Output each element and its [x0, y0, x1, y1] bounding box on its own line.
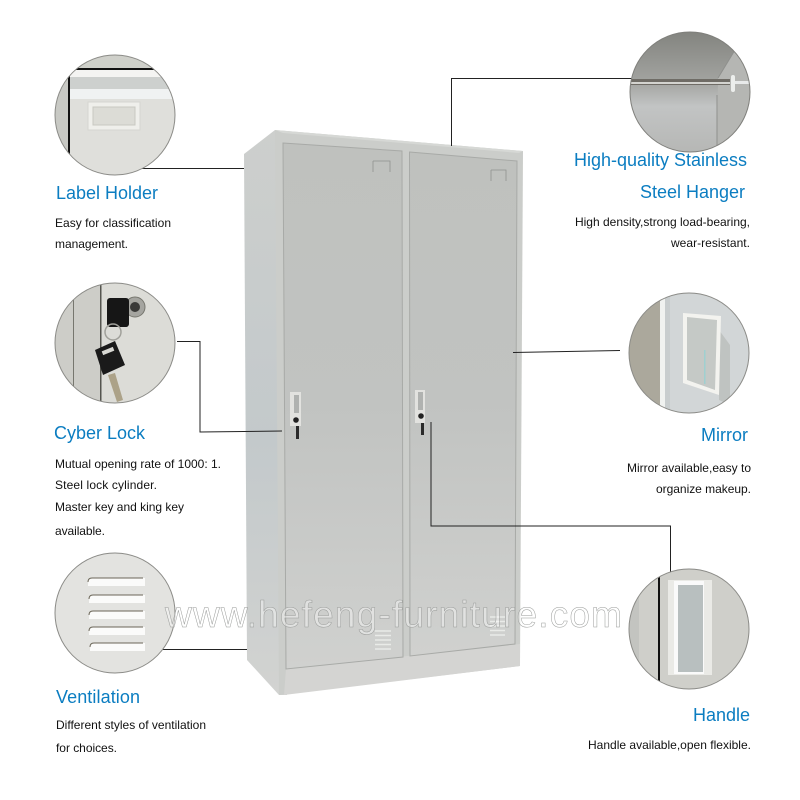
description: Mirror available,easy to — [627, 461, 751, 475]
description: Handle available,open flexible. — [588, 738, 751, 752]
connector lines — [140, 78, 670, 650]
description — [575, 215, 750, 250]
description — [55, 457, 221, 538]
vent slots — [375, 631, 391, 649]
description: High density,strong load-bearing, — [575, 215, 750, 229]
description: Different styles of ventilation — [56, 718, 206, 732]
panel: handle — [588, 569, 751, 752]
right door — [410, 152, 517, 656]
description: Mutual opening rate of 1000: 1. — [55, 457, 221, 471]
panel: stainless steel hanger — [574, 32, 752, 250]
panel: mirror — [627, 293, 751, 496]
handle and lock — [290, 392, 301, 439]
heading: Mirror — [701, 425, 748, 445]
icon: ventilation slots photo — [55, 553, 175, 673]
handle and lock — [415, 390, 425, 435]
cabinet front frame — [275, 130, 523, 695]
heading: Cyber Lock — [54, 423, 146, 443]
heading: High-quality Stainless — [574, 150, 747, 170]
panel: cyber lock — [54, 283, 221, 538]
description: available. — [55, 524, 105, 538]
icon: hanger rail photo — [630, 32, 752, 160]
heading: Steel Hanger — [640, 182, 745, 202]
icon: handle photo — [629, 569, 749, 689]
description: Master key and king key — [55, 500, 184, 514]
panel: ventilation — [55, 553, 206, 755]
icon: mirror photo — [629, 293, 749, 413]
label holder mark — [373, 161, 390, 172]
description: management. — [55, 237, 128, 251]
vent slots — [490, 617, 505, 635]
description: Steel lock cylinder. — [55, 478, 157, 492]
description — [627, 461, 751, 496]
watermark: www.hefeng-furniture.com — [164, 594, 622, 635]
description: wear-resistant. — [670, 236, 750, 250]
label holder mark — [491, 170, 506, 181]
left door — [283, 143, 403, 669]
description: organize makeup. — [656, 482, 751, 496]
heading — [574, 150, 747, 202]
icon: lock and key photo — [55, 283, 175, 403]
locker cabinet — [244, 130, 523, 695]
heading: Handle — [693, 705, 750, 725]
heading: Ventilation — [56, 687, 140, 707]
heading: Label Holder — [56, 183, 158, 203]
panel: label holder — [55, 55, 175, 251]
description: for choices. — [56, 741, 117, 755]
cabinet side panel — [244, 130, 287, 695]
icon: label holder photo — [55, 55, 175, 175]
description: Easy for classification — [55, 216, 171, 230]
description — [56, 718, 206, 755]
description — [55, 216, 171, 251]
